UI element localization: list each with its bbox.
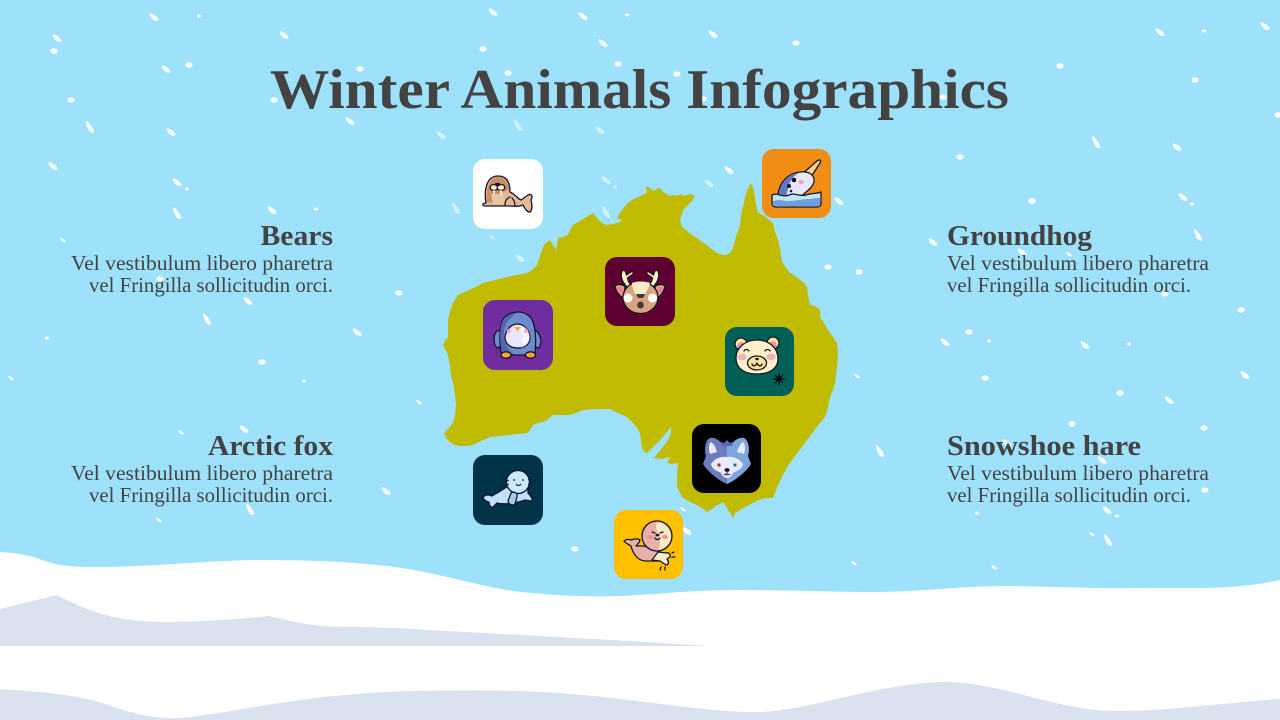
icon: wolf: [692, 424, 761, 493]
text block: Arctic fox: vel Fringilla sollicitudin orci.: [89, 483, 333, 507]
text block: Groundhog: Vel vestibulum libero pharetra: [947, 251, 1210, 275]
icon: pink seal: [614, 510, 683, 579]
falling snow: [8, 8, 1280, 569]
text block: Groundhog: Groundhog: [947, 221, 1092, 252]
text block: Groundhog: [947, 221, 1210, 297]
text block: Bears: vel Fringilla sollicitudin orci.: [89, 273, 333, 297]
icon: blue seal: [473, 455, 543, 525]
icon: deer: [605, 257, 675, 326]
text block: Snowshoe hare: vel Fringilla sollicitudin orci.: [947, 483, 1191, 507]
map of Australia: [443, 184, 838, 518]
text block: Bears: Vel vestibulum libero pharetra: [71, 251, 334, 275]
text block: Arctic fox: Vel vestibulum libero pharetra: [71, 461, 334, 485]
text block: Arctic fox: [71, 431, 334, 507]
text block: Bears: [71, 221, 334, 297]
snow ground: [0, 552, 1280, 720]
icon: polar bear: [725, 327, 794, 396]
icon: walrus: [473, 159, 543, 229]
text block: Arctic fox: Arctic fox: [208, 431, 333, 462]
text block: Snowshoe hare: [947, 431, 1210, 507]
icon: penguin: [483, 300, 553, 370]
text block: Bears: Bears: [260, 221, 333, 252]
icon: narwhal: [762, 149, 831, 218]
title: Winter Animals Infographics: [270, 59, 1009, 121]
text block: Snowshoe hare: Vel vestibulum libero pharetra: [947, 461, 1210, 485]
text block: Groundhog: vel Fringilla sollicitudin orci.: [947, 273, 1191, 297]
distant grey snow hills: [0, 595, 710, 646]
text block: Snowshoe hare: Snowshoe hare: [947, 431, 1141, 462]
foreground grey snow drift: [0, 682, 1280, 720]
